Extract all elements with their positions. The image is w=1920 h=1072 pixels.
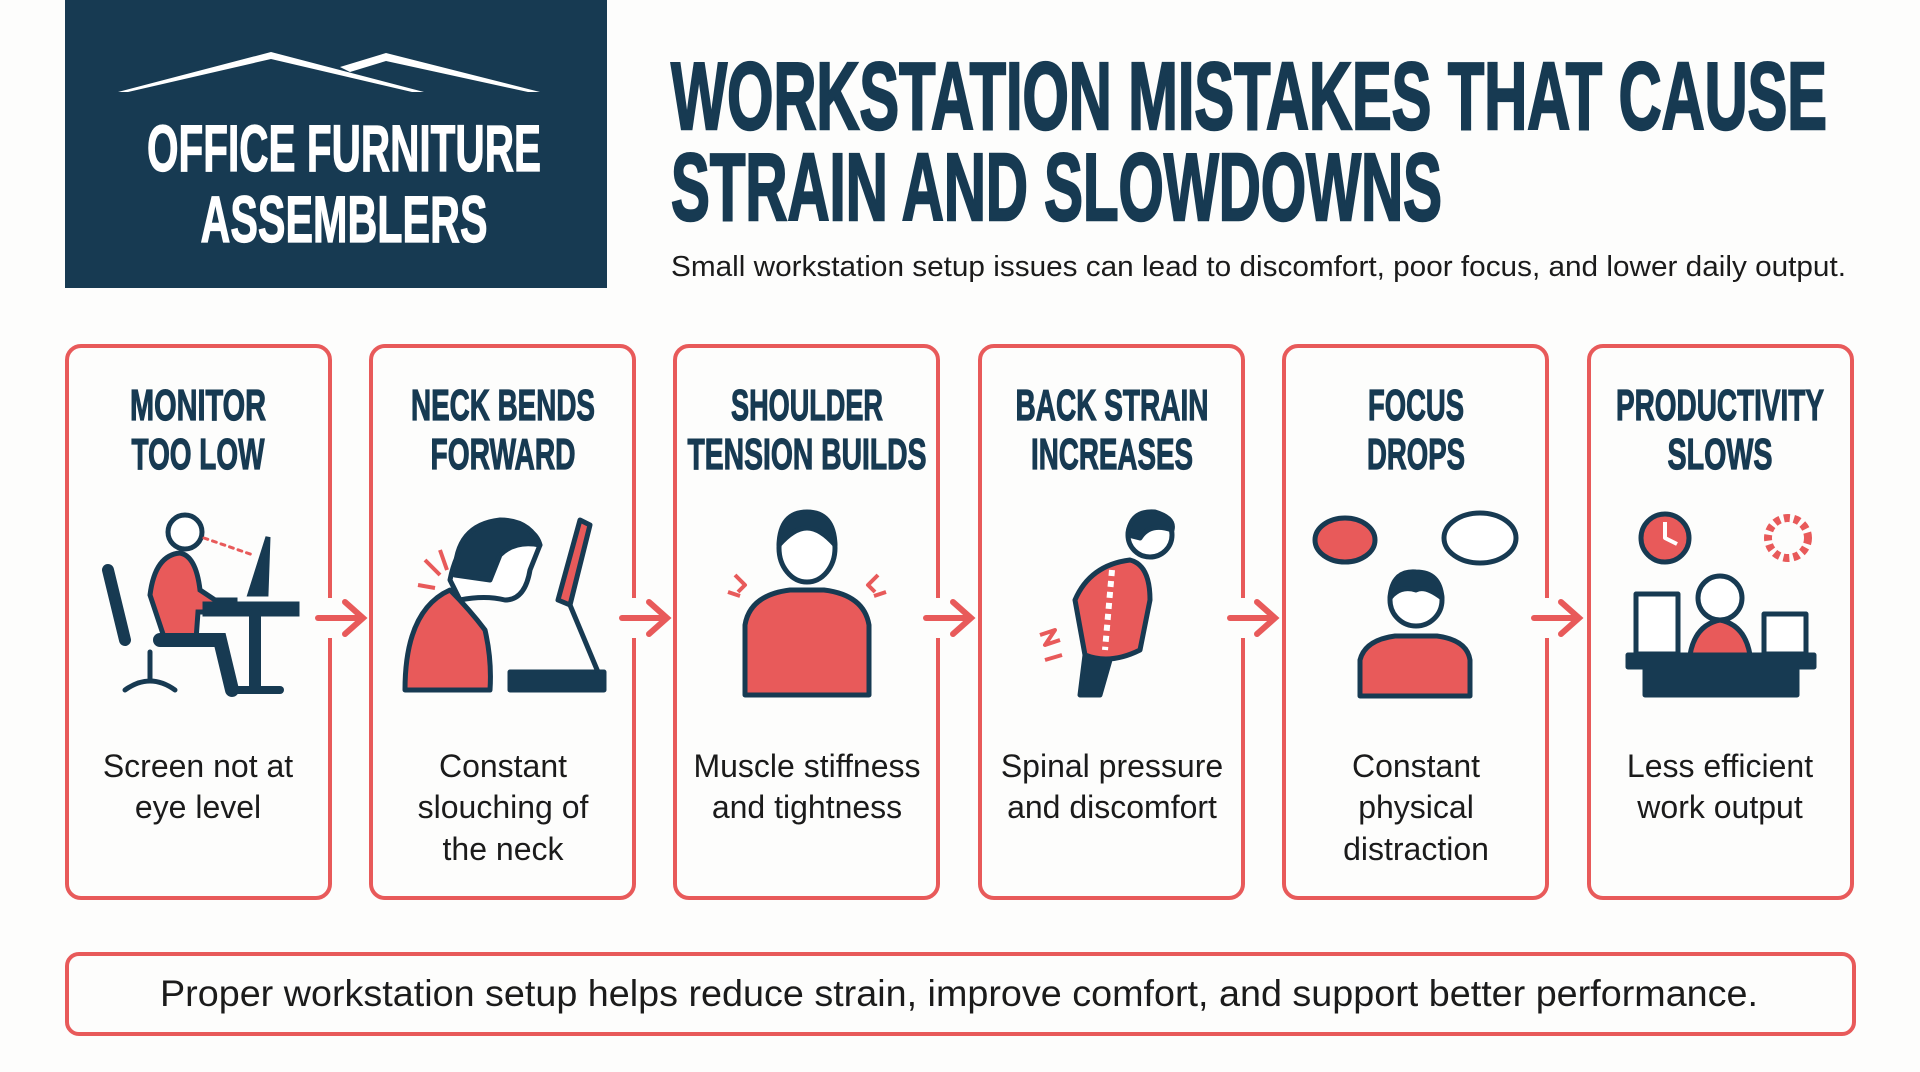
panel: productivity slows: Less efficient <box>1627 748 1813 784</box>
panel: back strain: BACK STRAIN <box>1016 381 1208 430</box>
panel: productivity slows: SLOWS <box>1668 430 1772 479</box>
panel: focus drops: distraction <box>1343 831 1489 867</box>
subtitle: Small workstation setup issues can lead to discomfort, poor focus, and lower daily output. <box>671 251 1846 283</box>
icon: overwhelmed worker <box>1628 514 1814 695</box>
icon: tense shoulders <box>728 512 886 695</box>
panel: monitor too low: TOO LOW <box>132 430 265 479</box>
arrow 5 <box>1534 598 1593 638</box>
panel: shoulder tension: and tightness <box>712 789 902 825</box>
callout: bottom banner <box>67 954 1854 1034</box>
panel: back strain: INCREASES <box>1031 430 1193 479</box>
logo text: OFFICE FURNITURE <box>147 111 541 185</box>
icon: person at low monitor <box>108 515 297 690</box>
panel: focus drops: physical <box>1358 789 1474 825</box>
callout: bottom banner: Proper workstation setup helps reduce strain, improve comfort, and support better performance. <box>160 973 1758 1014</box>
logo text <box>147 111 541 256</box>
panel: shoulder tension: SHOULDER <box>731 381 883 430</box>
logo panel <box>65 0 607 288</box>
title <box>671 43 1827 241</box>
arrow 2 <box>622 598 681 638</box>
panel: back strain: Spinal pressure <box>1001 748 1223 784</box>
panel: shoulder tension <box>675 346 938 898</box>
panel: back strain: and discomfort <box>1007 789 1217 825</box>
panel: productivity slows: work output <box>1636 789 1803 825</box>
panel: neck bends forward: Constant <box>439 748 567 784</box>
panel: focus drops <box>1284 346 1547 898</box>
panel: shoulder tension: Muscle stiffness <box>693 748 921 784</box>
panel: neck bends forward: slouching of <box>418 789 588 825</box>
title: STRAIN AND SLOWDOWNS <box>671 134 1442 241</box>
panel: neck bends forward: FORWARD <box>430 430 576 479</box>
icon: back pain <box>1040 512 1172 695</box>
panel: neck bends forward: the neck <box>443 831 564 867</box>
arrow 4 <box>1230 598 1289 638</box>
logo text: ASSEMBLERS <box>200 182 488 256</box>
icon: roof lines <box>118 52 540 92</box>
panel: focus drops: Constant <box>1352 748 1480 784</box>
icon: bent neck <box>405 520 604 690</box>
arrow 1 <box>318 598 377 638</box>
panel: productivity slows <box>1589 346 1852 898</box>
panel: neck bends forward <box>371 346 634 898</box>
panel: focus drops: DROPS <box>1367 430 1465 479</box>
arrow 3 <box>926 598 985 638</box>
panel: shoulder tension: TENSION BUILDS <box>688 430 926 479</box>
panel: monitor too low: MONITOR <box>130 381 266 430</box>
panel: back strain <box>980 346 1243 898</box>
icon: distracted person <box>1315 513 1516 696</box>
panel: focus drops: FOCUS <box>1368 381 1464 430</box>
panel: monitor too low: Screen not at <box>103 748 293 784</box>
panel: neck bends forward: NECK BENDS <box>411 381 595 430</box>
panel: monitor too low <box>67 346 330 898</box>
panel: monitor too low: eye level <box>135 789 261 825</box>
